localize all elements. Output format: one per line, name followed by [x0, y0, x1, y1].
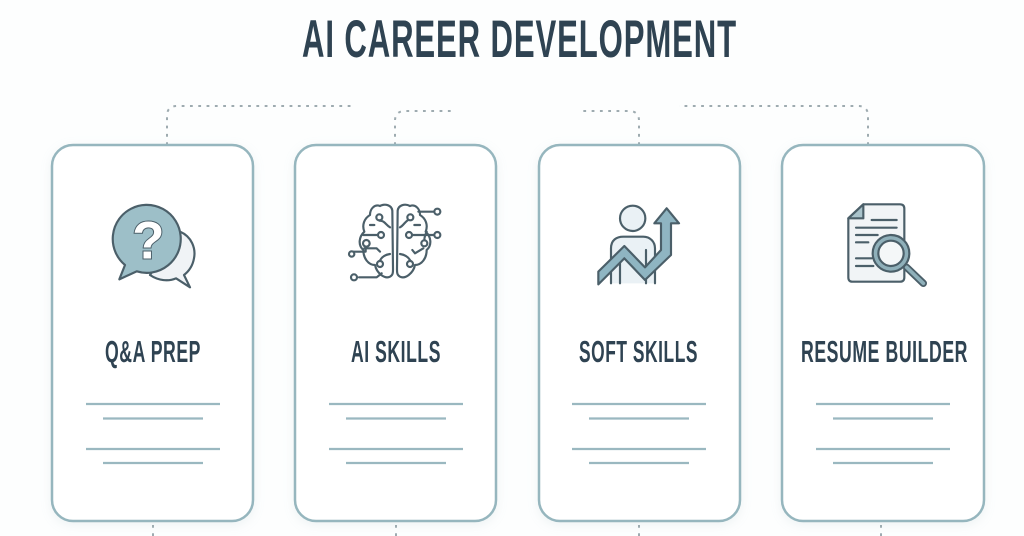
title: AI CAREER DEVELOPMENT: [302, 10, 737, 69]
panel: AI skills: [295, 145, 496, 521]
label: soft skills: SOFT SKILLS: [579, 334, 698, 369]
icon: person with rising arrow: [598, 206, 679, 284]
panel: soft skills: [539, 145, 740, 521]
icon: question speech bubbles: [113, 205, 194, 287]
panel: resume builder: [782, 145, 984, 521]
dotted connectors: [153, 106, 881, 536]
icon: question speech bubbles: ?: [132, 211, 164, 270]
label: Q&A prep: Q&A PREP: [105, 334, 201, 369]
panel: Q&A prep: [52, 145, 253, 521]
text placeholder lines: [572, 404, 706, 463]
text placeholder lines: [816, 404, 950, 463]
text placeholder lines: [329, 404, 463, 463]
label: AI skills: AI SKILLS: [351, 334, 441, 369]
text placeholder lines: [86, 404, 220, 463]
icon: circuit brain: [349, 205, 440, 280]
icon: document with magnifier: [848, 204, 923, 283]
